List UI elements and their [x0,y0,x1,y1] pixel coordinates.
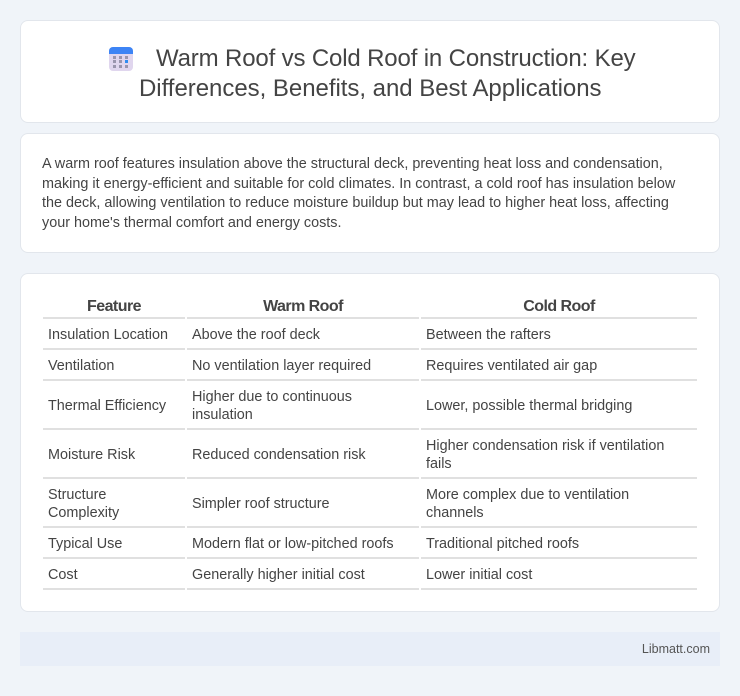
row: insulation location: Above the roof deck [192,327,320,343]
row: ventilation: Ventilation [48,358,114,374]
row: insulation location [48,327,551,343]
footer credit: Libmatt.com [642,642,710,656]
row: moisture risk [48,438,664,472]
row: ventilation [48,358,597,374]
row: structure complexity: Simpler roof structure [192,496,330,512]
row: cost: Cost [48,567,78,583]
footer bar [20,632,720,666]
column headers: Cold Roof [523,298,595,315]
header card [20,20,720,123]
row: thermal efficiency: Lower, possible thermal bridging [426,398,632,414]
row: ventilation: No ventilation layer required [192,358,371,374]
row: moisture risk: Reduced condensation risk [192,447,366,463]
intro paragraph: making it energy-efficient and suitable for cold climates. In contrast, a cold roof has insulation below [42,176,675,192]
intro paragraph [42,156,676,231]
row: structure complexity: Complexity [48,505,119,521]
row: typical use: Modern flat or low-pitched roofs [192,536,394,552]
title: Differences, Benefits, and Best Applications [139,75,602,102]
row: thermal efficiency: Thermal Efficiency [48,398,166,414]
row: typical use [48,536,579,552]
row: typical use: Typical Use [48,536,122,552]
intro text card [20,133,720,253]
row: structure complexity: Structure [48,487,106,503]
icon: calendar [109,47,133,71]
row: thermal efficiency: Higher due to continuous [192,389,352,405]
row: insulation location: Insulation Location [48,327,168,343]
row: insulation location: Between the rafters [426,327,551,343]
row: thermal efficiency: insulation [192,407,253,423]
row: moisture risk: fails [426,456,452,472]
title: Warm Roof vs Cold Roof in Construction: Key [156,45,636,72]
intro paragraph: the deck, allowing ventilation to reduce moisture buildup but may lead to higher heat loss, affecting [42,195,669,211]
row: structure complexity [48,487,629,521]
row: cost: Lower initial cost [426,567,532,583]
row: cost [48,567,532,583]
row: structure complexity: channels [426,505,484,521]
row: moisture risk: Moisture Risk [48,447,135,463]
column headers: Feature [87,298,141,315]
row: structure complexity: More complex due to ventilation [426,487,629,503]
row: cost: Generally higher initial cost [192,567,365,583]
row: moisture risk: Higher condensation risk if ventilation [426,438,664,454]
row: thermal efficiency [48,389,632,423]
row: typical use: Traditional pitched roofs [426,536,579,552]
column headers [87,298,596,315]
row: ventilation: Requires ventilated air gap [426,358,597,374]
column headers: Warm Roof [263,298,343,315]
table card [20,273,720,612]
comparison table [43,298,697,590]
intro paragraph: your home's thermal comfort and energy costs. [42,215,341,231]
title [139,45,636,102]
intro paragraph: A warm roof features insulation above the structural deck, preventing heat loss and condensation, [42,156,663,172]
